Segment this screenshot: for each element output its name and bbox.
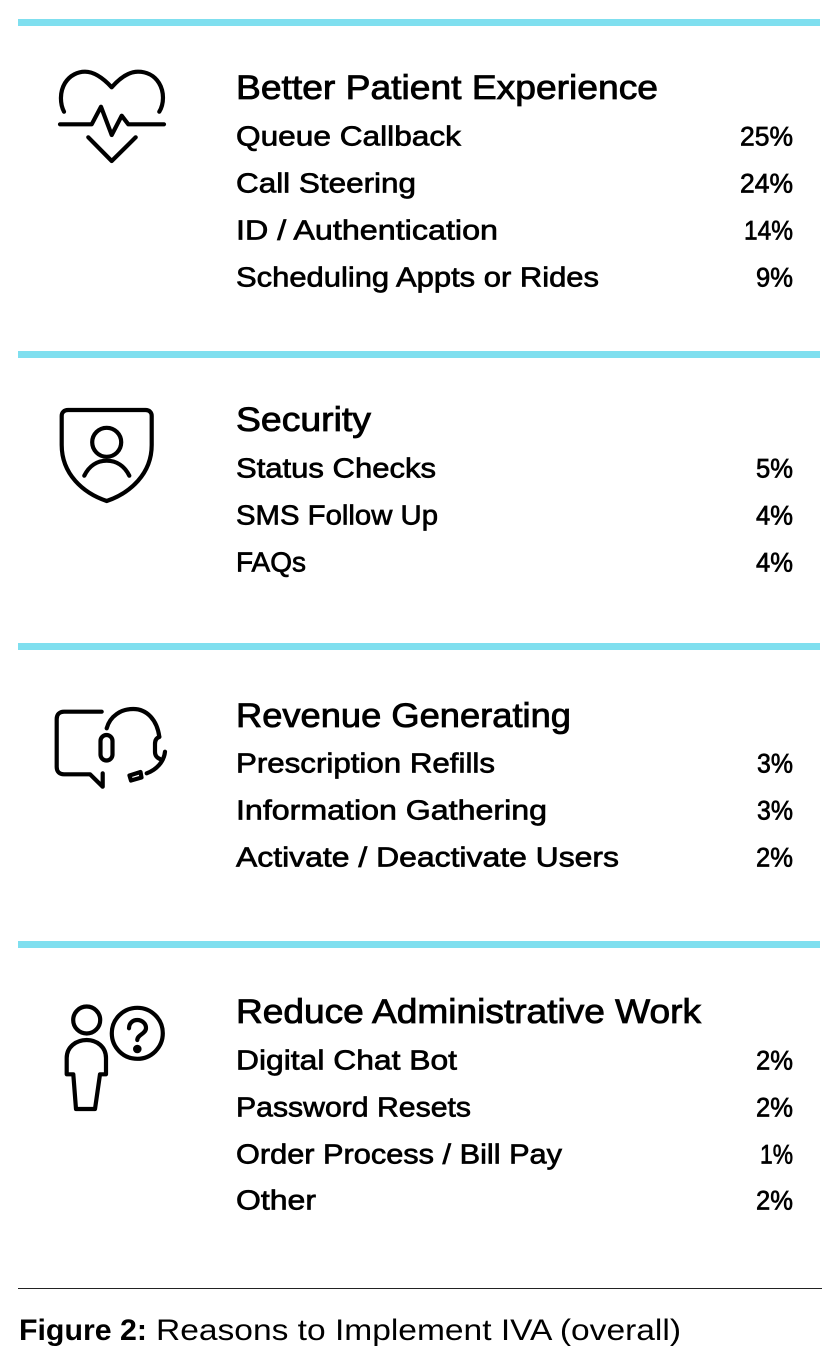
row: order process bill pay: 1% [760, 1140, 793, 1170]
row: order process bill pay [236, 1138, 793, 1170]
row: password resets [236, 1092, 793, 1122]
row: information gathering [236, 794, 793, 826]
icon: heart with pulse [60, 72, 164, 161]
row: call steering [236, 168, 793, 198]
row: other [236, 1184, 793, 1216]
row: sms follow up: SMS Follow Up [236, 500, 438, 530]
row: call steering: 24% [740, 168, 793, 198]
row: queue callback: Queue Callback [236, 120, 462, 152]
row: other: Other [236, 1184, 316, 1216]
panel: revenue generating [18, 643, 820, 872]
row: status checks: Status Checks [236, 452, 436, 484]
row: scheduling: 9% [756, 262, 793, 292]
icon: shield with person [62, 410, 152, 501]
row: information gathering: Information Gathering [236, 794, 547, 826]
row: activate deactivate users [236, 842, 793, 872]
row: sms follow up [236, 500, 793, 530]
row: prescription refills: Prescription Refills [236, 748, 495, 778]
row: information gathering: 3% [757, 796, 793, 826]
row: status checks: 5% [756, 454, 793, 484]
row: prescription refills: 3% [757, 748, 793, 778]
heading: security: Security [236, 401, 371, 439]
panel: security [18, 351, 820, 578]
row: prescription refills [236, 748, 793, 778]
row: password resets: Password Resets [236, 1092, 471, 1122]
row: scheduling: Scheduling Appts or Rides [236, 262, 599, 292]
row: other: 2% [756, 1186, 793, 1216]
row: id authentication: ID / Authentication [236, 214, 498, 246]
row: id authentication: 14% [744, 216, 793, 246]
heading: reduce administrative work: Reduce Administrative Work [236, 993, 702, 1031]
row: queue callback: 25% [740, 122, 793, 152]
row: sms follow up: 4% [756, 500, 793, 530]
row: digital chat bot [236, 1044, 793, 1076]
row: order process bill pay: Order Process / Bill Pay [236, 1138, 562, 1170]
row: faqs: 4% [756, 548, 793, 578]
panel: reduce administrative work [18, 941, 820, 1216]
row: faqs: FAQs [236, 546, 306, 578]
caption: Figure 2: [19, 1314, 147, 1347]
heading: revenue generating: Revenue Generating [236, 697, 571, 735]
row: activate deactivate users: 2% [756, 842, 793, 872]
row: faqs [236, 546, 793, 578]
icon: person with question mark [67, 1006, 163, 1109]
heading: better patient experience: Better Patient Experience [236, 69, 658, 107]
row: scheduling [236, 262, 793, 292]
row: password resets: 2% [756, 1092, 793, 1122]
icon: chat bubble with headset [57, 709, 165, 787]
caption: Reasons to Implement IVA (overall) [156, 1314, 681, 1347]
panel: better patient experience [18, 19, 820, 292]
row: digital chat bot: Digital Chat Bot [236, 1044, 457, 1076]
row: call steering: Call Steering [236, 168, 416, 198]
row: digital chat bot: 2% [756, 1046, 793, 1076]
row: id authentication [236, 214, 793, 246]
row: activate deactivate users: Activate / Deactivate Users [236, 842, 619, 872]
row: status checks [236, 452, 793, 484]
row: queue callback [236, 120, 793, 152]
